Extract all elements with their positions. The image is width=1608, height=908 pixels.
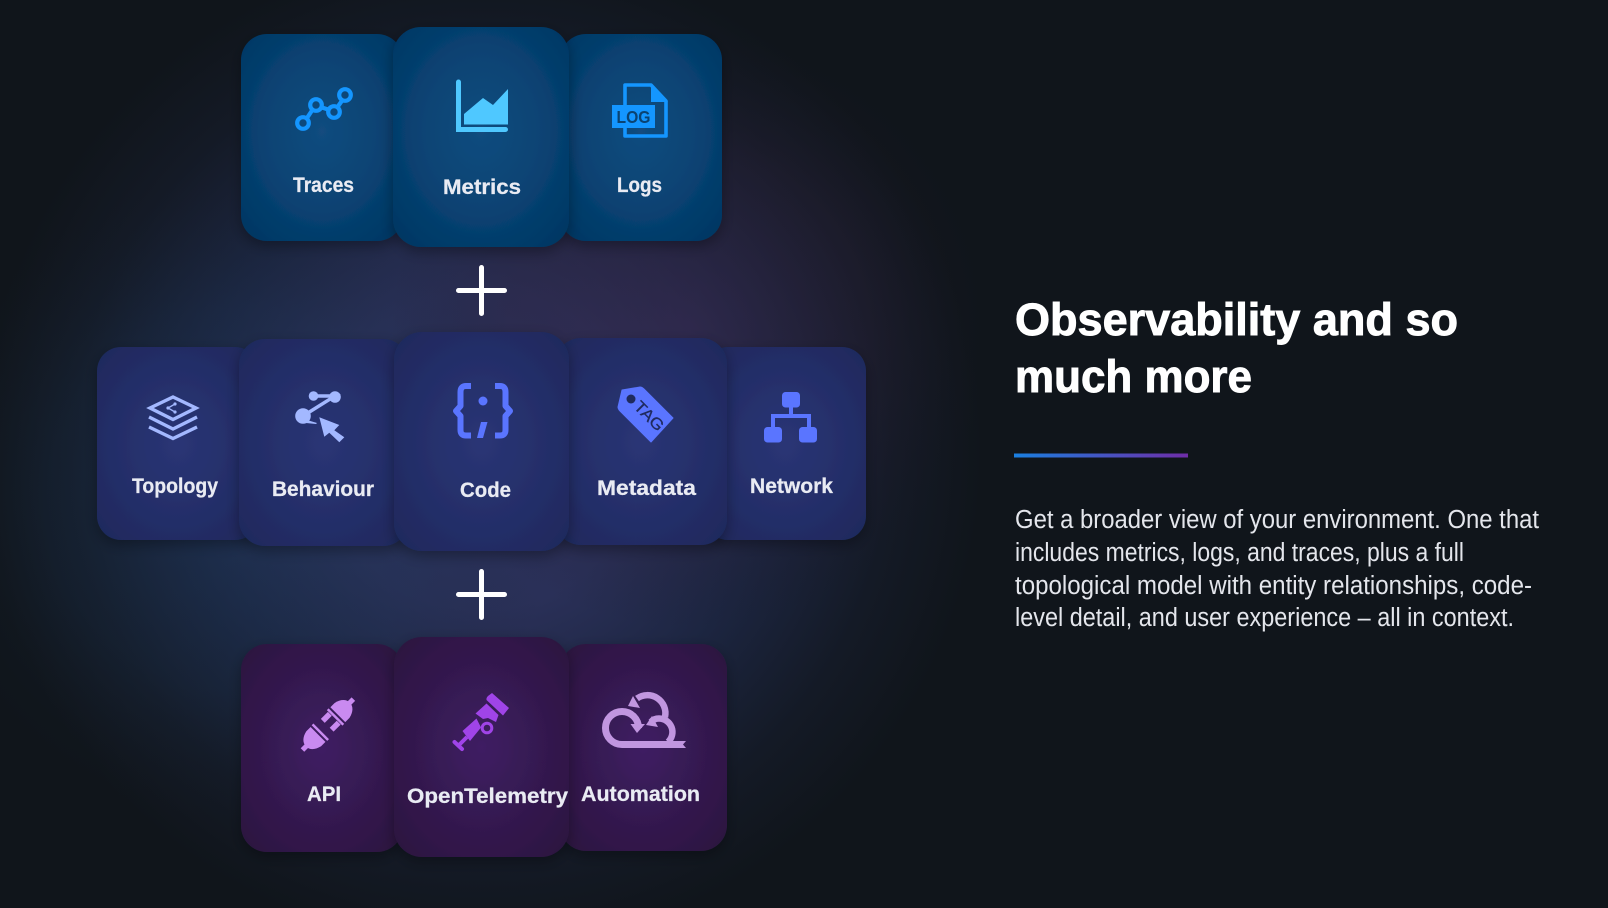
- divider: [1014, 454, 1188, 458]
- card: Traces: [241, 34, 403, 241]
- body text: [1015, 506, 1539, 632]
- icon: traces: [297, 89, 351, 129]
- body text: level detail, and user experience – all in context.: [1015, 604, 1514, 632]
- card: Behaviour: [239, 339, 409, 546]
- icon: code braces: [456, 386, 510, 438]
- card: OpenTelemetry: [394, 637, 569, 857]
- label: Automation: Automation: [581, 783, 700, 806]
- card: Network: [704, 347, 866, 540]
- title: Observability and so: [1015, 294, 1458, 345]
- body text: Get a broader view of your environment. One that: [1015, 506, 1539, 534]
- card: Automation: [560, 644, 727, 851]
- label: Metadata: Metadata: [597, 477, 696, 500]
- label: Topology: Topology: [132, 475, 218, 498]
- icon: cloud automation: [606, 695, 686, 748]
- plus: bottom: [458, 572, 504, 618]
- icon: log file: LOG: [616, 107, 650, 127]
- card: Logs: [560, 34, 722, 241]
- plus: top: [458, 268, 504, 314]
- icon: behaviour path and cursor: [295, 391, 344, 442]
- label: API: API: [307, 783, 341, 806]
- card: Topology: [97, 347, 259, 540]
- label: Code: Code: [460, 479, 511, 502]
- title: [1015, 294, 1458, 402]
- title: much more: [1015, 351, 1252, 402]
- icon: network hierarchy: [764, 392, 817, 442]
- label: OpenTelemetry: OpenTelemetry: [407, 785, 568, 808]
- card: Metrics: [393, 27, 569, 247]
- card: Code: [394, 332, 569, 551]
- icon: topology layers: [149, 397, 197, 438]
- card: Metadata: [555, 338, 727, 545]
- icon: tag: TAG: [630, 398, 667, 435]
- body text: includes metrics, logs, and traces, plus a full: [1015, 539, 1464, 567]
- card: API: [241, 644, 403, 852]
- label: Metrics: Metrics: [443, 176, 521, 199]
- label: Logs: Logs: [617, 174, 662, 197]
- label: Behaviour: Behaviour: [272, 478, 374, 501]
- icon: plug: [295, 691, 361, 758]
- icon: area chart: [456, 80, 508, 132]
- icon: tag: [618, 387, 673, 442]
- label: Network: Network: [750, 475, 833, 498]
- icon: telescope: [454, 693, 509, 749]
- label: Traces: Traces: [293, 174, 354, 197]
- body text: topological model with entity relationships, code-: [1015, 572, 1532, 600]
- icon: log file: [612, 84, 668, 136]
